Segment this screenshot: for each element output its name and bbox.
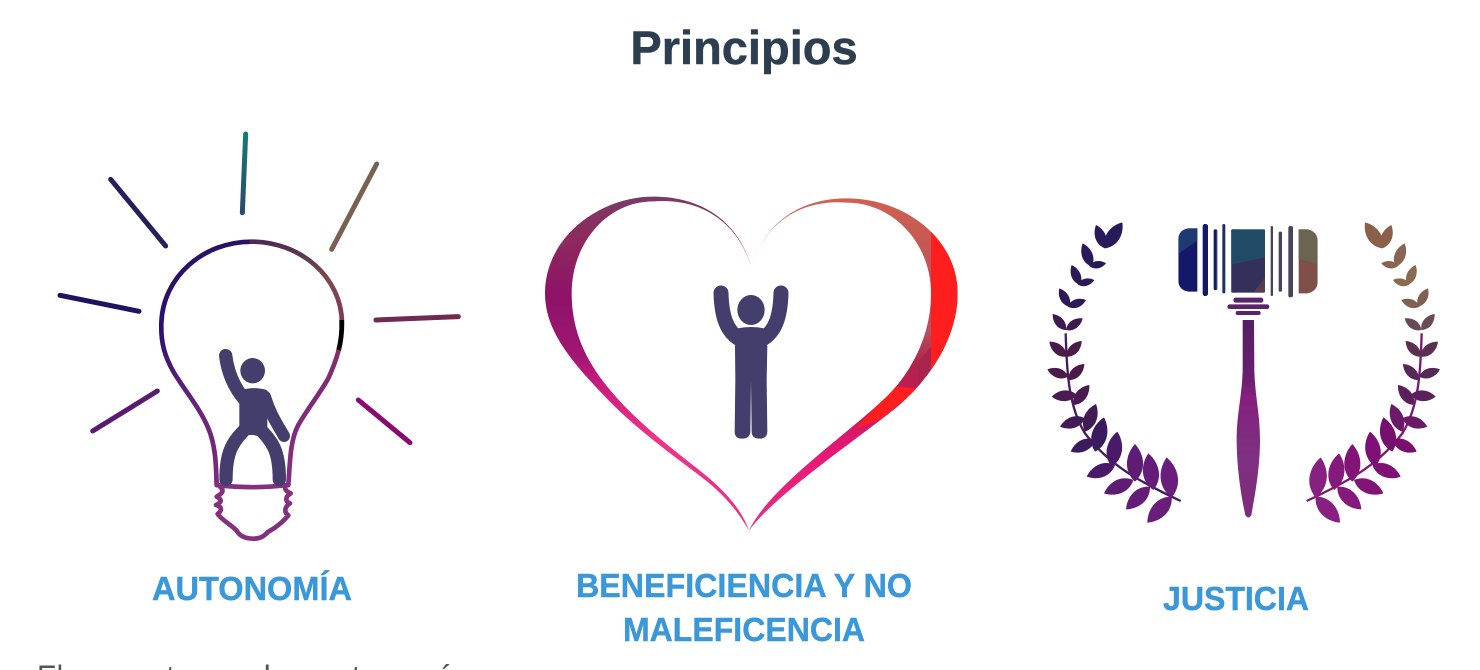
label: beneficiencia y no maleficencia: MALEFICENCIA — [623, 611, 865, 648]
heart ribbon — [545, 196, 958, 530]
person climbing — [226, 356, 284, 479]
clipped body text — [37, 659, 467, 670]
icon: light bulb with person — [60, 134, 458, 539]
gavel handle — [1237, 320, 1260, 517]
left laurel branch — [1046, 219, 1181, 528]
right laurel branch — [1307, 219, 1442, 528]
label: beneficiencia y no maleficencia: BENEFICIENCIA Y NO — [576, 567, 912, 604]
bulb outline — [161, 242, 342, 539]
gavel head — [1178, 224, 1318, 298]
title: Principios — [630, 21, 858, 74]
icon: heart with person — [545, 196, 958, 530]
label: beneficiencia y no maleficencia — [576, 567, 912, 648]
gavel collar — [1227, 298, 1269, 315]
label: autonomía: AUTONOMÍA — [152, 570, 352, 607]
label: justicia: JUSTICIA — [1163, 580, 1309, 617]
icon: gavel and laurel wreath — [1046, 219, 1442, 528]
person with raised arms — [721, 293, 781, 439]
light rays — [60, 134, 458, 443]
